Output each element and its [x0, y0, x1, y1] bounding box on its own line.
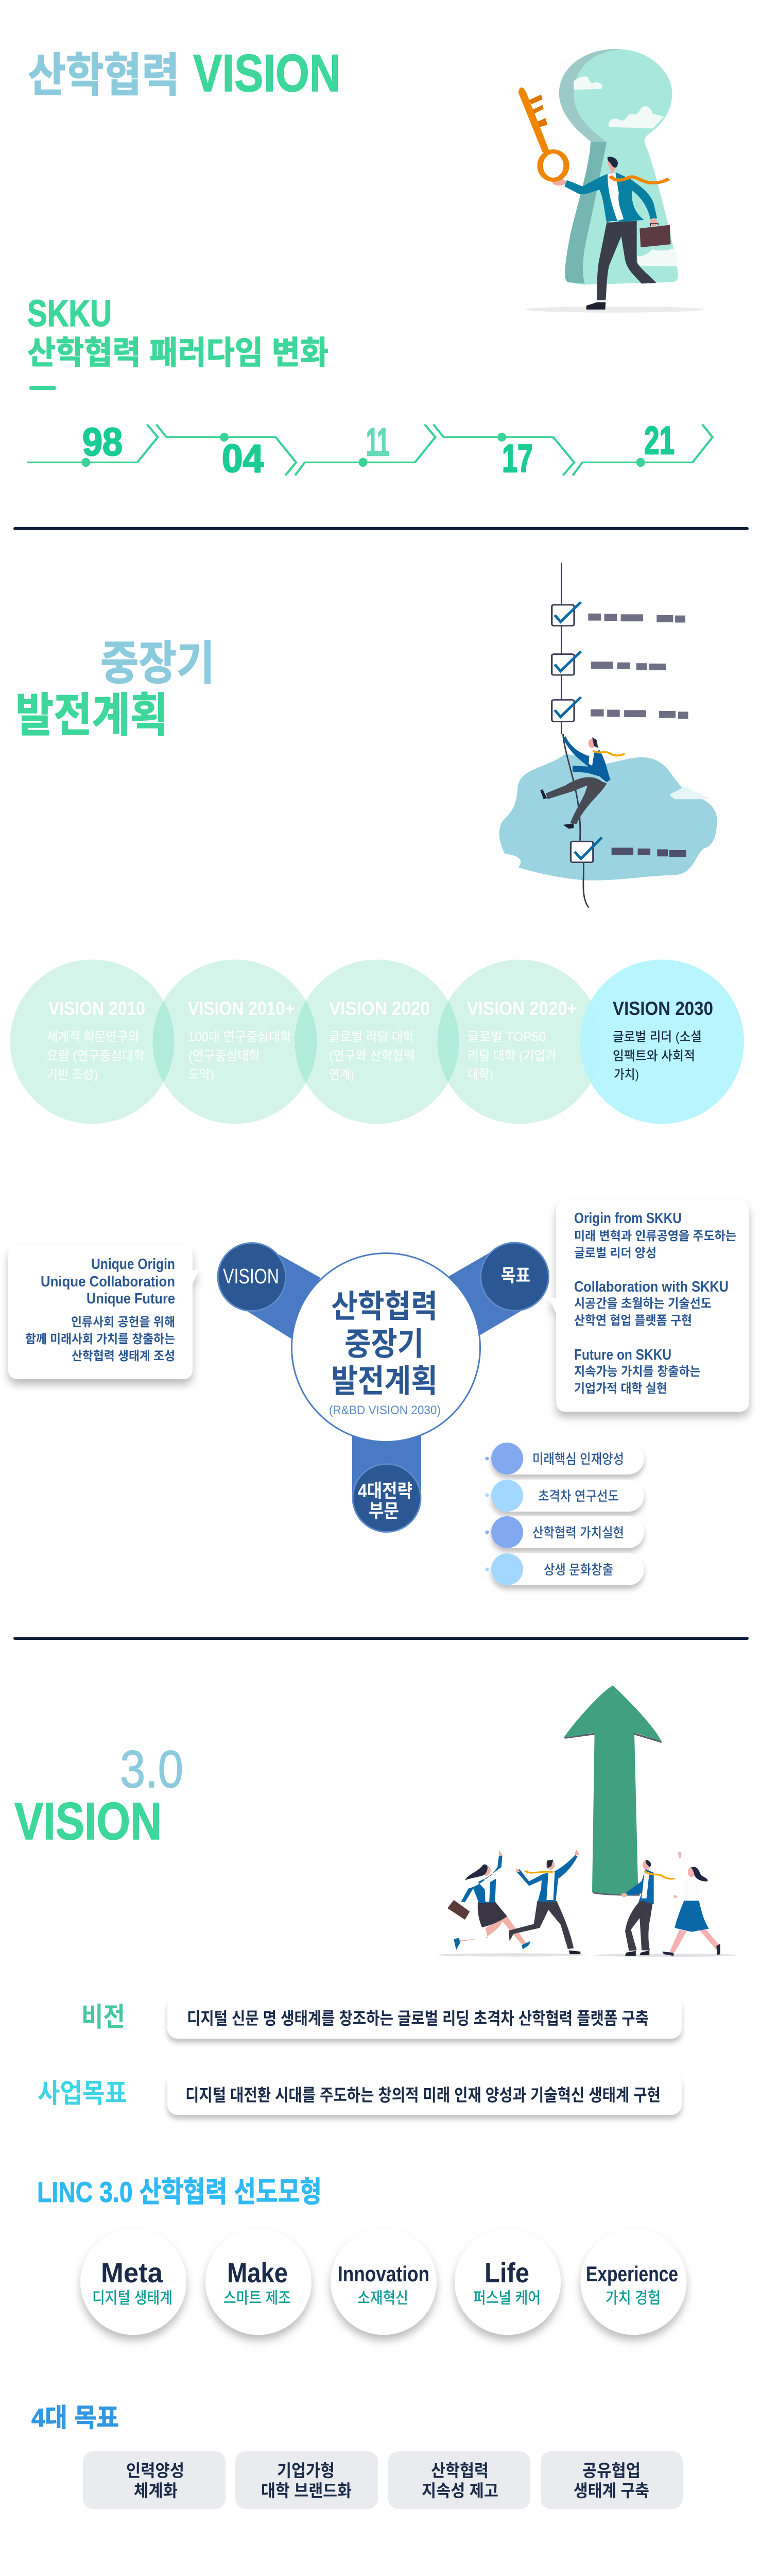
row: 사업목표: 사업목표	[38, 2079, 127, 2109]
row: 비전: 비전	[81, 2003, 125, 2032]
hub diagram: R&BD VISION 2030	[218, 1243, 549, 1532]
callout: vision description: Unique Origin	[91, 1256, 175, 1273]
callout: goals description: Collaboration with SKKU	[574, 1279, 729, 1295]
circle text: VISION 2010: 요람 (연구중심대학	[47, 1049, 145, 1063]
pill: 미래핵심 인재양성: 미래핵심 인재양성	[532, 1451, 624, 1467]
node: 4대전략 부문	[353, 1464, 421, 1532]
circle text: VISION 2020+: 대학)	[468, 1067, 493, 1082]
illustration: climber on checklist rope	[499, 563, 717, 908]
circle text: VISION 2020	[329, 998, 430, 1082]
circle: Innovation: 소재혁신	[357, 2289, 408, 2307]
callout: goals description: Future on SKKU	[574, 1347, 671, 1363]
circle text: VISION 2020+: 글로벌 TOP50	[468, 1030, 546, 1044]
circle: Innovation	[331, 2229, 437, 2335]
callout: goals description: 산학연 협업 플랫폼 구현	[574, 1314, 692, 1328]
circle text: VISION 2020: VISION 2020	[329, 998, 430, 1019]
timeline: paradigm change 98 to 21	[27, 419, 713, 481]
node: 4대전략 부문: 부문	[369, 1500, 399, 1521]
box: 기업가형 대학 브랜드화: 기업가형	[277, 2461, 335, 2480]
running man	[509, 1849, 580, 1954]
callout: vision description: Unique Future	[87, 1291, 175, 1307]
circle: Make	[205, 2229, 312, 2335]
circle text: VISION 2010+: 100대 연구중심대학	[188, 1030, 291, 1044]
circle text: VISION 2010	[47, 998, 145, 1082]
circle text: VISION 2010+: VISION 2010+	[188, 998, 295, 1019]
model circles	[80, 2229, 687, 2335]
timeline: paradigm change 98 to 21: 11	[366, 420, 389, 464]
heading: 3.0 VISION: 3.0	[120, 1740, 183, 1799]
timeline: paradigm change 98 to 21: 17	[502, 437, 533, 481]
node: 목표	[481, 1243, 549, 1311]
box: 인력양성 체계화: 인력양성	[126, 2461, 184, 2480]
illustration: people lifting green arrow	[437, 1685, 737, 1957]
pill: 산학협력 가치실현	[485, 1516, 644, 1548]
node: 4대전략 부문: 4대전략	[358, 1480, 412, 1501]
circle: Life	[455, 2229, 561, 2335]
woman in blue skirt	[662, 1852, 720, 1956]
callout: goals description: 미래 변혁과 인류공영을 주도하는	[574, 1229, 736, 1243]
heading: SKKU 산학협력 패러다임 변화	[27, 293, 328, 390]
callout: goals description: 기업가적 대학 실현	[574, 1382, 667, 1396]
center circle	[291, 1253, 480, 1442]
heading: 3.0 VISION	[14, 1740, 183, 1851]
goal boxes	[83, 2451, 683, 2509]
circle text: VISION 2020: 연계)	[329, 1067, 354, 1082]
circle text: VISION 2020+	[467, 998, 577, 1082]
circle text: VISION 2030	[613, 998, 713, 1082]
callout: vision description: 산학협력 생태계 조성	[72, 1349, 175, 1363]
circle text: VISION 2030: VISION 2030	[613, 998, 713, 1019]
circle text: VISION 2030: 글로벌 리더 (소셜	[613, 1030, 702, 1044]
callout: goals description: 글로벌 리더 양성	[574, 1246, 656, 1260]
box: 산학협력 지속성 제고: 산학협력	[431, 2461, 489, 2480]
box: 공유협업 생태계 구축: 생태계 구축	[574, 2481, 649, 2500]
pill: 산학협력 가치실현: 산학협력 가치실현	[532, 1525, 624, 1540]
row: 비전: 디지털 신문 명 생태계를 창조하는 글로벌 리딩 초격차 산학협력 플랫폼 구축	[187, 2009, 649, 2028]
circle: Experience: 가치 경험	[606, 2289, 661, 2307]
circle text: VISION 2010: 세계적 학문연구의	[47, 1030, 139, 1044]
circle: Make: 스마트 제조	[223, 2289, 291, 2307]
heading: SKKU 산학협력 패러다임 변화: SKKU	[27, 293, 112, 334]
illustration: man with key at keyhole	[518, 49, 704, 313]
timeline: paradigm change 98 to 21: 21	[644, 419, 674, 463]
callout: vision description: 함께 미래사회 가치를 창출하는	[25, 1332, 175, 1346]
circle: Life: Life	[485, 2258, 529, 2289]
woman with briefcase	[447, 1850, 530, 1950]
callout: vision description: Unique Collaboration	[41, 1274, 175, 1290]
circle: Experience: Experience	[586, 2262, 678, 2286]
man holding arrow	[621, 1859, 674, 1956]
circle text: VISION 2020: 글로벌 리딩 대학	[329, 1030, 414, 1044]
node: VISION	[218, 1243, 286, 1311]
box: 기업가형 대학 브랜드화: 대학 브랜드화	[261, 2481, 352, 2500]
box: 공유협업 생태계 구축: 공유협업	[582, 2461, 641, 2480]
circle: Experience	[581, 2229, 687, 2335]
box: 산학협력 지속성 제고	[388, 2451, 530, 2509]
circle text: VISION 2030: 가치)	[614, 1067, 639, 1082]
center circle: 발전계획	[331, 1364, 438, 1399]
heading: 3.0 VISION: VISION	[14, 1792, 162, 1851]
row: 사업목표: 디지털 대전환 시대를 주도하는 창의적 미래 인재 양성과 기술혁신 생태계 구현	[185, 2086, 661, 2105]
center circle: (R&BD VISION 2030)	[329, 1403, 441, 1417]
timeline: paradigm change 98 to 21: 98	[82, 420, 123, 464]
circle text: VISION 2020+: 리딩 대학 (기업가	[468, 1049, 557, 1063]
pill list: 4 strategies	[485, 1443, 644, 1585]
circle text: VISION 2010: 기반 조성)	[47, 1067, 98, 1082]
pill: 상생 문화창출: 상생 문화창출	[544, 1562, 613, 1578]
circle: Make: Make	[227, 2258, 288, 2289]
circle text: VISION 2010+: (연구중심대학	[188, 1049, 260, 1063]
row: 비전	[81, 1997, 682, 2039]
box: 산학협력 지속성 제고: 지속성 제고	[422, 2481, 498, 2500]
title: 산학협력 VISION	[28, 44, 341, 103]
circle text: VISION 2010+	[188, 998, 295, 1082]
heading: 4대 목표: 4대 목표	[31, 2403, 119, 2432]
pill: 미래핵심 인재양성	[485, 1443, 644, 1475]
node: 목표: 목표	[501, 1266, 530, 1286]
pill: 상생 문화창출	[485, 1553, 644, 1585]
circle: Meta	[80, 2229, 186, 2335]
heading: LINC 3.0 산학협력 선도모형: LINC 3.0 산학협력 선도모형	[37, 2176, 322, 2208]
box: 인력양성 체계화	[83, 2451, 226, 2509]
box: 공유협업 생태계 구축	[541, 2451, 683, 2509]
callout: vision description: 인류사회 공헌을 위해	[71, 1315, 175, 1329]
vision timeline circles	[10, 959, 744, 1124]
heading: 중장기 발전계획: 발전계획	[15, 690, 168, 741]
callout: vision description	[8, 1245, 199, 1379]
circle text: VISION 2030: 임팩트와 사회적	[613, 1049, 695, 1063]
timeline: paradigm change 98 to 21: 04	[222, 437, 264, 481]
circle text: VISION 2010+: 도약)	[188, 1067, 214, 1082]
title: 산학협력 VISION: VISION	[193, 44, 341, 103]
pill: 초격차 연구선도: 초격차 연구선도	[538, 1488, 619, 1504]
node: VISION: VISION	[223, 1264, 279, 1288]
heading: 중장기 발전계획: 중장기	[100, 638, 215, 689]
circle: Meta: Meta	[101, 2258, 163, 2289]
callout: goals description: 지속가능 가치를 창출하는	[574, 1365, 701, 1379]
circle: Meta: 디지털 생태계	[92, 2289, 172, 2307]
circle text: VISION 2010: VISION 2010	[48, 998, 145, 1019]
box: 기업가형 대학 브랜드화	[235, 2451, 378, 2509]
heading: 중장기 발전계획	[15, 638, 215, 741]
callout: goals description: 시공간을 초월하는 기술선도	[574, 1297, 712, 1311]
row: 사업목표	[38, 2073, 682, 2115]
center circle: 중장기	[344, 1327, 424, 1362]
circle text: VISION 2020: (연구와 산학협력	[329, 1049, 415, 1063]
circle: Innovation: Innovation	[338, 2262, 429, 2286]
center circle: 산학협력	[331, 1289, 438, 1325]
circle text: VISION 2020+: VISION 2020+	[467, 998, 577, 1019]
box: 인력양성 체계화: 체계화	[134, 2481, 178, 2500]
callout: goals description	[549, 1200, 749, 1412]
callout: goals description: Origin from SKKU	[574, 1210, 682, 1227]
title: 산학협력 VISION: 산학협력	[28, 50, 180, 101]
heading: SKKU 산학협력 패러다임 변화: 산학협력 패러다임 변화	[27, 335, 328, 371]
circle: Life: 퍼스널 케어	[473, 2289, 541, 2307]
pill: 초격차 연구선도	[485, 1480, 644, 1512]
